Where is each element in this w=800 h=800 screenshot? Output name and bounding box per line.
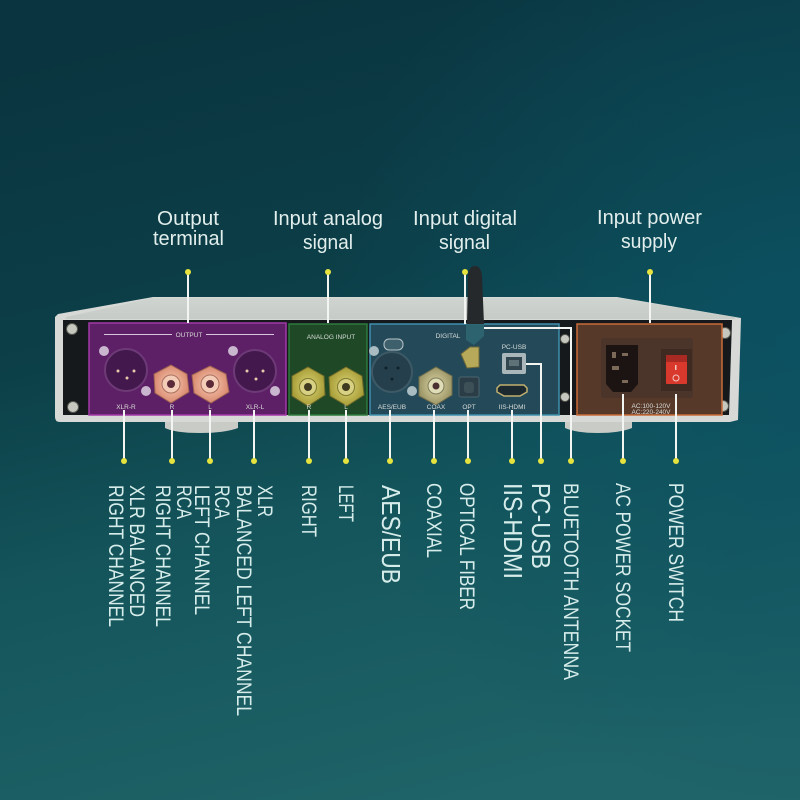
connector: optical (459, 377, 479, 397)
heading: input analog signal: signal (303, 232, 353, 254)
label: XLR balanced left channel: XLR (253, 485, 276, 517)
digital port labels: COAX (427, 404, 446, 411)
panel: analog input (289, 324, 367, 415)
pointer: XLR right (121, 410, 127, 464)
analog port labels: R (307, 404, 312, 411)
icon: power switch (661, 349, 692, 391)
pointer: IIS-HDMI (509, 410, 515, 464)
heading: output terminal: terminal (153, 228, 224, 250)
chassis top surface (66, 298, 735, 319)
pointer: output terminal (185, 269, 191, 323)
panel title: digital: DIGITAL (436, 333, 461, 340)
analog port labels: L (344, 404, 348, 411)
connector: RCA left (192, 366, 229, 403)
pointer: PC-USB (526, 364, 544, 464)
label: XLR balanced right channel: RIGHT CHANNEL (104, 485, 127, 627)
panel: output (89, 323, 286, 415)
heading: input power supply: Input power (597, 207, 702, 229)
digital port labels: OPT (462, 404, 476, 411)
pointer: bluetooth antenna (484, 328, 574, 464)
label: XLR balanced left channel (232, 485, 276, 716)
device: amplifier rear chassis (55, 297, 741, 433)
label: left: LEFT (334, 485, 357, 522)
panel: power input (577, 324, 722, 416)
voltage text: AC:100-120V (631, 403, 671, 410)
label: XLR balanced right channel: XLR BALANCED (125, 485, 148, 617)
label: RCA left channel: LEFT CHANNEL (190, 485, 213, 615)
label: IIS-HDMI: IIS-HDMI (498, 483, 528, 579)
connector: XLR left (228, 346, 280, 396)
voltage text (631, 403, 671, 416)
callout lines: top groups (185, 269, 653, 324)
label: RCA right channel: RIGHT CHANNEL (151, 485, 174, 627)
connector: PC-USB (502, 344, 526, 374)
label: AC power socket: AC POWER SOCKET (611, 483, 634, 652)
label: right: RIGHT (297, 485, 320, 537)
connector: XLR right (99, 346, 151, 396)
chassis black back plate (63, 320, 732, 415)
connector: AES/EUB (369, 339, 417, 396)
heading: output terminal: Output (157, 208, 219, 230)
pointer: coaxial (431, 410, 437, 464)
heading: input power supply: supply (621, 231, 677, 253)
connector: IIS-HDMI (497, 385, 527, 396)
screws (66, 324, 730, 412)
label: XLR balanced left channel: BALANCED LEFT CHANNEL (232, 485, 255, 716)
callout lines: bottom ports (121, 328, 679, 464)
output port labels: XLR-L (246, 404, 265, 411)
heading: input digital signal: Input digital (413, 208, 517, 230)
label: RCA left channel (190, 485, 233, 615)
output port labels: R (170, 404, 175, 411)
pointer: input power supply (647, 269, 653, 323)
digital port labels: AES/EUB (378, 404, 406, 411)
label: XLR balanced right channel (104, 485, 148, 627)
chassis frame (55, 297, 741, 422)
label: power switch: POWER SWITCH (664, 483, 687, 622)
output port labels: XLR-R (116, 404, 136, 411)
icon: bluetooth antenna (466, 266, 484, 345)
pointer: optical fiber (465, 410, 471, 464)
pointer: AES/EUB (387, 410, 393, 464)
connector: RCA right (154, 365, 189, 403)
label: RCA left channel: RCA (210, 485, 233, 519)
connector: PC-USB: PC-USB (502, 344, 526, 351)
connector: coaxial (419, 367, 452, 405)
digital port labels: IIS-HDMI (499, 404, 526, 411)
label: optical fiber: OPTICAL FIBER (455, 483, 478, 610)
pointer: RCA right (169, 410, 175, 464)
output port labels (116, 404, 265, 411)
pointer: AC power socket (620, 394, 626, 464)
pointer: RCA left (207, 410, 213, 464)
icon: AC power socket (606, 345, 638, 392)
label: coaxial: COAXIAL (422, 483, 445, 558)
voltage text: AC:220-240V (631, 409, 671, 416)
pointer: analog right (306, 410, 312, 464)
foot: left (165, 420, 238, 433)
pointer: input analog signal (325, 269, 331, 323)
pointer: analog left (343, 410, 349, 464)
connector: antenna base (461, 347, 479, 368)
panel: digital input (369, 324, 559, 415)
label: bluetooth antenna: BLUETOOTH ANTENNA (559, 483, 582, 680)
analog port labels (307, 404, 348, 411)
foot: right (565, 420, 632, 433)
connector: analog right (292, 367, 325, 406)
panel title: analog input: ANALOG INPUT (307, 334, 355, 341)
heading: input digital signal: signal (439, 232, 490, 254)
vertical port labels (104, 483, 687, 716)
label: AES/EUB: AES/EUB (376, 485, 406, 584)
socket plate (601, 338, 693, 398)
heading: input analog signal: Input analog (273, 208, 383, 230)
digital port labels (378, 404, 526, 411)
pointer: input digital signal (462, 269, 468, 324)
pointer: XLR left (251, 410, 257, 464)
connector: analog left (329, 367, 364, 406)
label: RCA right channel: RCA (172, 485, 195, 519)
label: PC-USB: PC-USB (526, 483, 556, 569)
pointer: power switch (673, 394, 679, 464)
label: RCA right channel (151, 485, 195, 627)
panel title: output: OUTPUT (176, 332, 202, 339)
output port labels: L (208, 404, 212, 411)
